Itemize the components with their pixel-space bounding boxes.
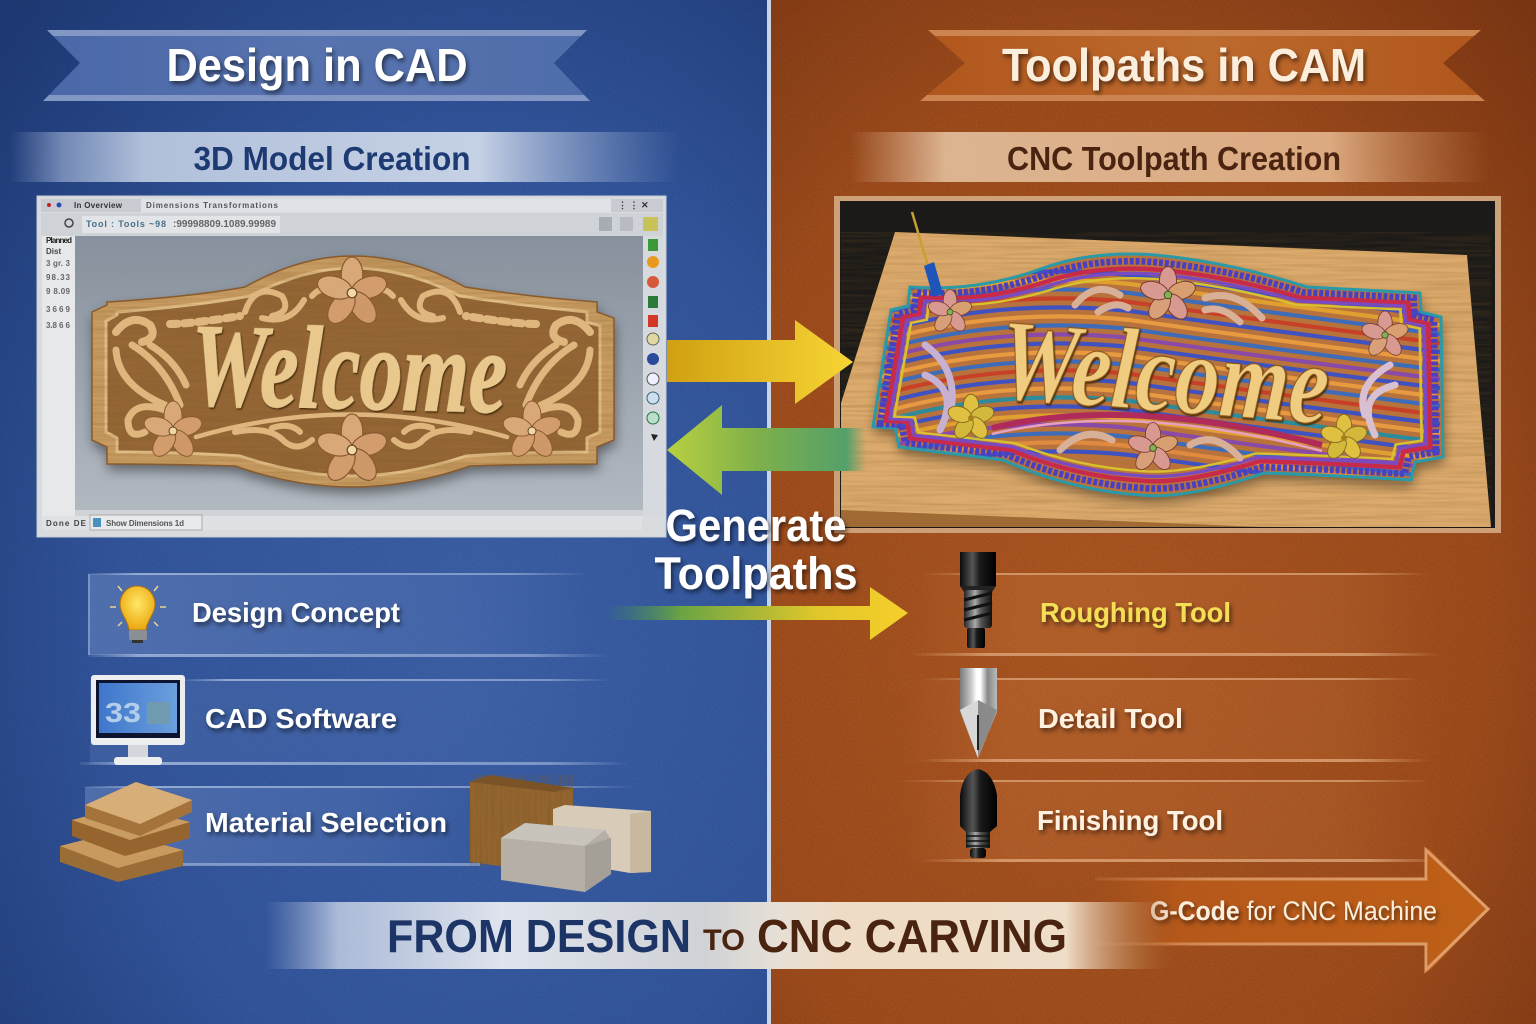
row: CAD Software: CAD Software	[205, 703, 397, 734]
Welcome lettering: Welcome	[995, 296, 1334, 450]
label: Generate Toolpaths: Toolpaths	[654, 548, 858, 599]
window toolbar: Tool : Tools ~98	[86, 219, 166, 229]
row: Material Selection	[60, 775, 651, 892]
panel: CAM background	[770, 0, 1536, 1024]
router bit pin	[912, 212, 943, 297]
left side panel: 9 8.09	[46, 287, 71, 296]
left side panel	[42, 236, 75, 516]
footer banner: FROM DESIGN	[387, 910, 691, 962]
window toolbar	[41, 213, 663, 236]
subheading: CNC Toolpath Creation	[850, 132, 1490, 182]
3D viewport	[75, 236, 643, 510]
row: Material Selection: Material Selection	[205, 807, 447, 838]
Welcome lettering: Welcome	[189, 299, 509, 438]
window title bar	[41, 199, 663, 212]
footer banner: CNC CARVING	[757, 910, 1067, 962]
panel: CAD software window	[37, 196, 666, 537]
panel: CAD background	[0, 0, 768, 1024]
arrow: CAD to CAM (yellow)	[667, 320, 853, 404]
subheading: 3D Model Creation: 3D Model Creation	[194, 140, 470, 177]
footer banner	[265, 902, 1175, 969]
row: Finishing Tool	[900, 769, 1450, 862]
label: Generate Toolpaths	[654, 500, 858, 599]
icon: monitor	[91, 675, 185, 765]
left side panel: 3.8 6 6	[46, 321, 71, 330]
heading ribbon: Design in CAD: Design in CAD	[166, 39, 468, 91]
left side panel: Planned	[46, 236, 72, 245]
icon: finishing tool	[960, 769, 997, 858]
arrow: G-Code for CNC Machine: G-Code for CNC Machine	[1150, 896, 1437, 926]
row: Roughing Tool	[910, 552, 1440, 656]
left side panel: Dist	[46, 247, 61, 256]
left side panel: 3 gr. 3	[46, 259, 71, 268]
status tabs: Show Dimensions 1d	[106, 519, 184, 528]
arrow: CAM to CAD (green)	[667, 405, 866, 495]
window title bar: In Overview	[74, 201, 123, 210]
right tool icons	[643, 236, 663, 516]
icon: light bulb	[110, 586, 166, 643]
label: Generate Toolpaths: Generate	[666, 500, 846, 551]
arrow: G-Code for CNC Machine	[1095, 848, 1490, 972]
wood board	[841, 232, 1491, 527]
left side panel: 3 6 6 9	[46, 305, 71, 314]
carved floral ornaments	[925, 289, 1395, 458]
row: Design Concept: Design Concept	[192, 597, 400, 628]
subheading: CNC Toolpath Creation: CNC Toolpath Creation	[1007, 140, 1341, 177]
arrow: to tools	[605, 587, 908, 640]
icon: wood planks	[60, 782, 192, 882]
multicolour toolpath sign	[870, 250, 1450, 500]
left side panel: 98.33	[46, 273, 71, 282]
row: Detail Tool: Detail Tool	[1038, 703, 1183, 734]
row: Finishing Tool: Finishing Tool	[1037, 805, 1223, 836]
row: Detail Tool	[900, 668, 1440, 762]
subheading: 3D Model Creation	[10, 132, 680, 182]
heading ribbon: Toolpaths in CAM	[920, 30, 1485, 101]
window title bar: Dimensions Transformations	[146, 201, 279, 210]
icon: detail tool	[960, 668, 997, 758]
window toolbar: :99998809.1089.99989	[173, 219, 276, 230]
window title bar: ⋮ ⋮ ✕	[618, 200, 649, 210]
heading ribbon: Toolpaths in CAM: Toolpaths in CAM	[1002, 39, 1366, 91]
status tabs	[42, 515, 642, 530]
carved wooden sign: Welcome	[92, 256, 614, 488]
icon: roughing tool	[960, 552, 996, 648]
row: Roughing Tool: Roughing Tool	[1040, 597, 1231, 628]
concentric toolpath rings	[873, 254, 1443, 496]
status tabs: Done DE	[46, 519, 87, 528]
scroll ornaments	[116, 289, 590, 447]
panel: CAM toolpath photo	[834, 196, 1501, 533]
icon: monitor: 33	[105, 697, 141, 728]
row: Design Concept	[88, 573, 608, 657]
footer banner: TO	[703, 924, 745, 957]
row: CAD Software	[80, 675, 630, 765]
icon: material blocks	[470, 775, 651, 892]
heading ribbon: Design in CAD	[43, 30, 590, 101]
